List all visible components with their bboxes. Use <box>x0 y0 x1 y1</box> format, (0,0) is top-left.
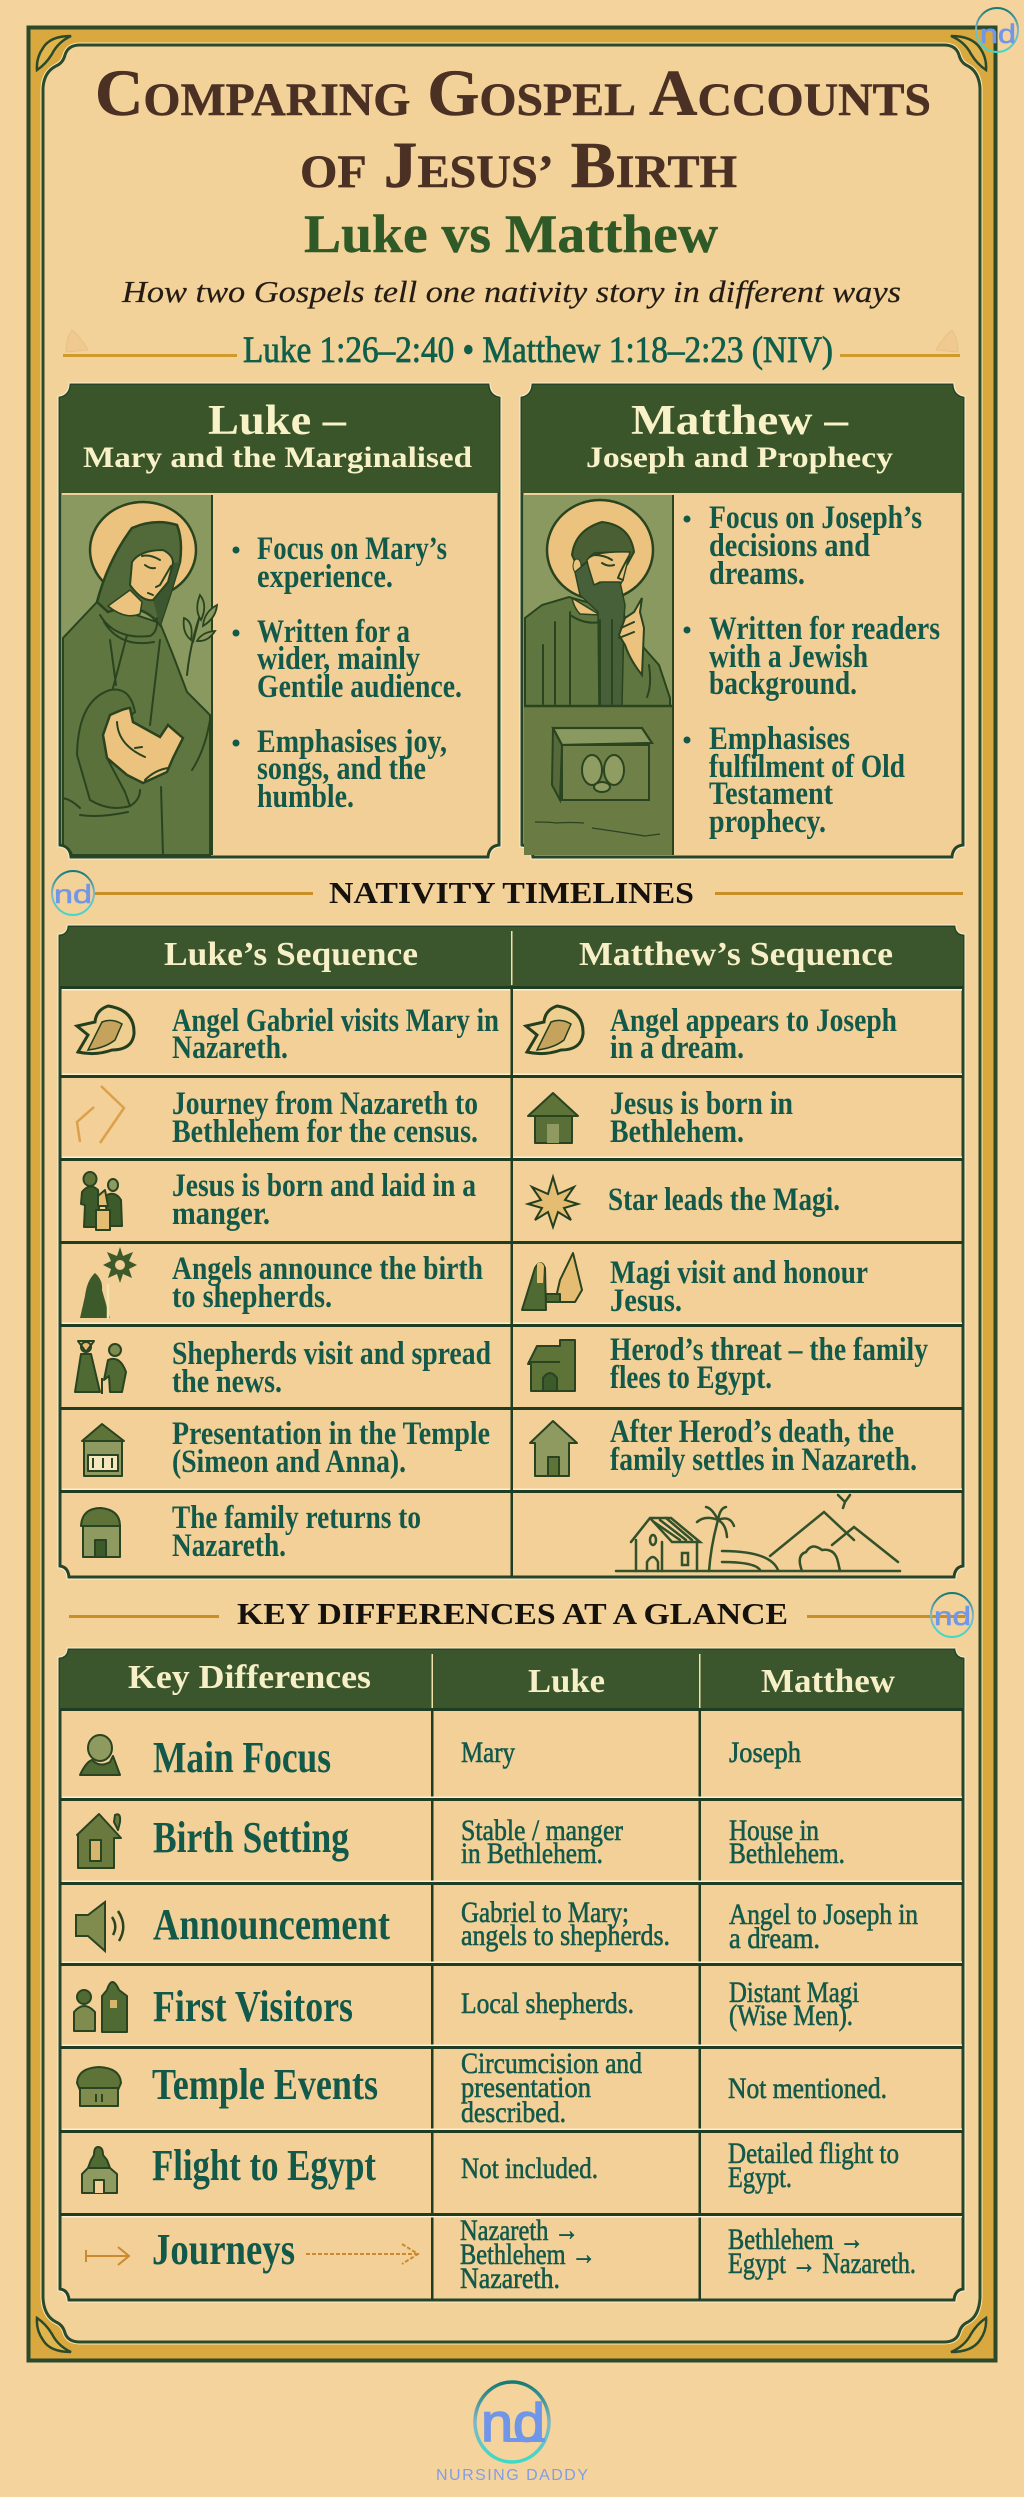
row 7 left: returns to Nazareth: Nazareth. <box>172 1528 286 1564</box>
text: Matthew bullets <box>684 500 940 840</box>
text: Matthew bullets: with a Jewish <box>709 639 868 675</box>
icon: visitors <box>74 1982 127 2032</box>
row: Temple Events: Not mentioned. <box>728 2072 887 2105</box>
icon: star <box>528 1177 578 1227</box>
row: Announcement: Gabriel to Mary; <box>461 1896 629 1929</box>
row: First Visitors: (Wise Men). <box>729 1999 853 2032</box>
row: Journeys: Nazareth. <box>460 2262 560 2295</box>
row: Announcement <box>76 1896 918 1955</box>
row 4 right: magi: Jesus. <box>610 1283 682 1319</box>
table header: key differences <box>60 1650 963 1709</box>
row: Announcement: a dream. <box>729 1922 820 1955</box>
row 3 right: star: Star leads the Magi. <box>608 1182 840 1218</box>
title: COMPARING GOSPEL ACCOUNTS <box>95 57 931 130</box>
row: Temple Events: Temple Events <box>152 2060 378 2109</box>
row: First Visitors: First Visitors <box>153 1982 353 2031</box>
row 3 left: manger: Jesus is born and laid in a <box>172 1168 476 1204</box>
row: Flight to Egypt: Egypt. <box>728 2161 792 2194</box>
icon: logo mid right <box>931 1593 973 1637</box>
row: Announcement: Announcement <box>153 1900 390 1949</box>
text: Matthew bullets: fulfilment of Old <box>709 749 905 785</box>
row 6 right: settles in Nazareth <box>530 1414 917 1478</box>
row 7 left: returns to Nazareth: The family returns to <box>172 1500 421 1536</box>
row: Birth Setting: Birth Setting <box>153 1813 349 1862</box>
row 1 left: Gabriel <box>77 1003 499 1066</box>
row 1 left: Gabriel: Angel Gabriel visits Mary in <box>172 1003 499 1039</box>
icon: shepherds <box>75 1341 126 1394</box>
row: First Visitors <box>74 1976 859 2032</box>
illustration: house, palm and mountains <box>616 1495 900 1571</box>
illustration: Mary <box>62 495 217 855</box>
row: Main Focus <box>80 1733 801 1782</box>
row 5 right: flees to Egypt: Herod’s threat – the family <box>610 1332 928 1368</box>
table header: sequences <box>60 927 963 987</box>
icon: angel <box>77 1006 134 1054</box>
logo: Nursing Daddy <box>436 2382 588 2484</box>
panel: Matthew <box>522 385 963 857</box>
row 6 left: presentation: Presentation in the Temple <box>172 1416 490 1452</box>
row 5 right: flees to Egypt: flees to Egypt. <box>610 1360 772 1396</box>
row: Temple Events: presentation <box>461 2071 591 2104</box>
row 5 left: shepherds visit: the news. <box>172 1364 282 1400</box>
row: Journeys <box>86 2214 916 2295</box>
text: Luke bullets: wider, mainly <box>257 641 420 677</box>
icon: domed house <box>81 1508 120 1557</box>
icon: house <box>77 1814 121 1868</box>
text: Luke bullets <box>232 531 462 815</box>
row: Flight to Egypt: Not included. <box>461 2152 598 2185</box>
row: Flight to Egypt: Detailed flight to <box>728 2137 899 2170</box>
table: Nativity timelines <box>60 927 963 1577</box>
text: Luke bullets: Focus on Mary’s <box>257 531 447 567</box>
scripture reference: Luke 1:26–2:40 • Matthew 1:18–2:23 (NIV) <box>243 330 833 371</box>
text: Matthew bullets: background. <box>709 666 857 702</box>
row 1 left: Gabriel: Nazareth. <box>172 1030 288 1066</box>
row: Temple Events: Circumcision and <box>461 2047 642 2080</box>
row 3 right: star <box>528 1177 840 1227</box>
row 6 right: settles in Nazareth: After Herod’s death, the <box>610 1414 894 1450</box>
row 1 right: Joseph dream: in a dream. <box>610 1030 744 1066</box>
icon: tower <box>82 2147 117 2193</box>
panel header: Luke: Mary and the Marginalised <box>83 441 472 474</box>
row 2 left: journey: Journey from Nazareth to <box>172 1086 478 1122</box>
row 4 right: magi: Magi visit and honour <box>610 1255 868 1291</box>
row: Flight to Egypt <box>82 2137 899 2194</box>
row 7 left: returns to Nazareth <box>81 1500 421 1564</box>
row 3 left: manger <box>81 1168 476 1232</box>
title: OF JESUS’ BIRTH <box>300 129 737 202</box>
row 4 left: angels and shepherds: Angels announce the birth <box>172 1251 483 1287</box>
icon: magi <box>522 1253 582 1310</box>
text: Luke bullets: experience. <box>257 559 393 595</box>
icon: logo top right <box>976 8 1018 52</box>
row: Journeys: Bethlehem → <box>460 2238 596 2271</box>
row: Birth Setting: Bethlehem. <box>729 1837 845 1870</box>
row 6 left: presentation <box>82 1416 490 1480</box>
heading: Nativity Timelines: NATIVITY TIMELINES <box>329 875 694 910</box>
heading: Key Differences <box>69 1596 965 1631</box>
table header: key differences: Key Differences <box>128 1659 371 1696</box>
heading: Key Differences: KEY DIFFERENCES AT A GLANCE <box>237 1596 788 1631</box>
icon: logo mid left: nd <box>54 879 92 909</box>
icon: logo mid right: nd <box>934 1601 971 1631</box>
row: Journeys: Journeys <box>152 2225 295 2274</box>
icon: shepherd and star <box>80 1247 137 1319</box>
icon: journey route <box>77 1086 124 1143</box>
row 5 right: flees to Egypt <box>528 1332 928 1396</box>
row 5 left: shepherds visit: Shepherds visit and spread <box>172 1336 491 1372</box>
row: Main Focus: Main Focus <box>153 1733 331 1782</box>
text: Luke bullets: humble. <box>257 779 354 815</box>
row: Temple Events: described. <box>461 2096 566 2129</box>
row 4 right: magi <box>522 1253 868 1319</box>
icon: person <box>80 1735 120 1775</box>
panel header: Matthew: Matthew – <box>631 398 849 444</box>
row 3 left: manger: manger. <box>172 1196 270 1232</box>
row: Birth Setting: House in <box>729 1814 819 1847</box>
text: Matthew bullets: Written for readers <box>709 611 940 647</box>
row 2 left: journey <box>77 1086 478 1150</box>
icon: temple <box>82 1424 124 1476</box>
row: Birth Setting: in Bethlehem. <box>461 1837 603 1870</box>
table: Key differences <box>60 1650 963 2300</box>
row: Temple Events <box>77 2047 887 2129</box>
text: Matthew bullets: Focus on Joseph’s <box>709 500 922 536</box>
row: Journeys: Egypt → Nazareth. <box>728 2247 916 2280</box>
table header: key differences: Matthew <box>761 1663 895 1700</box>
row: Announcement: angels to shepherds. <box>461 1919 670 1952</box>
row 1 right: Joseph dream <box>526 1003 897 1066</box>
icon: house <box>530 1421 577 1476</box>
row 6 left: presentation: (Simeon and Anna). <box>172 1444 406 1480</box>
row: Main Focus: Mary <box>461 1736 515 1769</box>
text: Luke bullets: Emphasises joy, <box>257 724 447 760</box>
row: Journeys: Bethlehem → <box>728 2223 864 2256</box>
logo: Nursing Daddy: nd <box>481 2393 545 2453</box>
arrow: small <box>86 2247 129 2265</box>
table header: sequences: Luke’s Sequence <box>164 936 418 973</box>
panel header: Matthew: Joseph and Prophecy <box>586 441 893 474</box>
panel header: Matthew <box>522 385 963 493</box>
row 2 left: journey: Bethlehem for the census. <box>172 1114 478 1150</box>
row: Announcement: Angel to Joseph in <box>729 1898 918 1931</box>
row: First Visitors: Local shepherds. <box>461 1987 634 2020</box>
row: Journeys: Nazareth → <box>460 2214 579 2247</box>
text: Matthew bullets: decisions and <box>709 528 870 564</box>
text: Luke bullets: Written for a <box>257 614 410 650</box>
icon: house with tower <box>528 1340 575 1391</box>
table header: sequences: Matthew’s Sequence <box>579 936 893 973</box>
icon: angel <box>526 1006 583 1054</box>
arrow: dotted <box>306 2244 418 2264</box>
row 2 right: born in Bethlehem: Jesus is born in <box>610 1086 793 1122</box>
row 2 right: born in Bethlehem <box>528 1086 793 1150</box>
panel header: Luke: Luke – <box>208 398 347 444</box>
text: Matthew bullets: prophecy. <box>709 804 826 840</box>
panel: Luke <box>60 385 499 857</box>
text: Matthew bullets: dreams. <box>709 556 805 592</box>
row: Birth Setting: Stable / manger <box>461 1814 623 1847</box>
row 4 left: angels and shepherds <box>80 1247 483 1319</box>
text: Luke bullets: songs, and the <box>257 751 426 787</box>
logo: Nursing Daddy: NURSING DADDY <box>436 2467 588 2484</box>
icon: temple <box>77 2067 121 2106</box>
row 6 right: settles in Nazareth: family settles in Nazareth. <box>610 1442 917 1478</box>
table header: key differences: Luke <box>528 1663 605 1700</box>
row: Flight to Egypt: Flight to Egypt <box>152 2141 376 2190</box>
heading: Nativity Timelines <box>94 875 963 910</box>
row: Main Focus: Joseph <box>729 1736 801 1769</box>
icon: speaker <box>76 1902 123 1951</box>
icon: house <box>528 1093 578 1143</box>
row: Birth Setting <box>77 1813 845 1870</box>
row 1 right: Joseph dream: Angel appears to Joseph <box>610 1003 897 1039</box>
row 5 left: shepherds visit <box>75 1336 491 1400</box>
text: Matthew bullets: Emphasises <box>709 721 850 757</box>
panel header: Luke <box>60 385 499 493</box>
row 4 left: angels and shepherds: to shepherds. <box>172 1279 332 1315</box>
row 2 right: born in Bethlehem: Bethlehem. <box>610 1114 744 1150</box>
text: Matthew bullets: Testament <box>709 776 833 812</box>
row: First Visitors: Distant Magi <box>729 1976 859 2009</box>
title <box>95 57 931 202</box>
illustration: Joseph <box>524 495 674 855</box>
text: Luke bullets: Gentile audience. <box>257 669 462 705</box>
icon: logo top right: nd <box>980 19 1016 49</box>
icon: logo mid left <box>52 871 94 915</box>
tagline: How two Gospels tell one nativity story in different ways <box>121 274 901 309</box>
subtitle: Luke vs Matthew <box>304 204 718 264</box>
icon: holy family <box>81 1172 122 1230</box>
